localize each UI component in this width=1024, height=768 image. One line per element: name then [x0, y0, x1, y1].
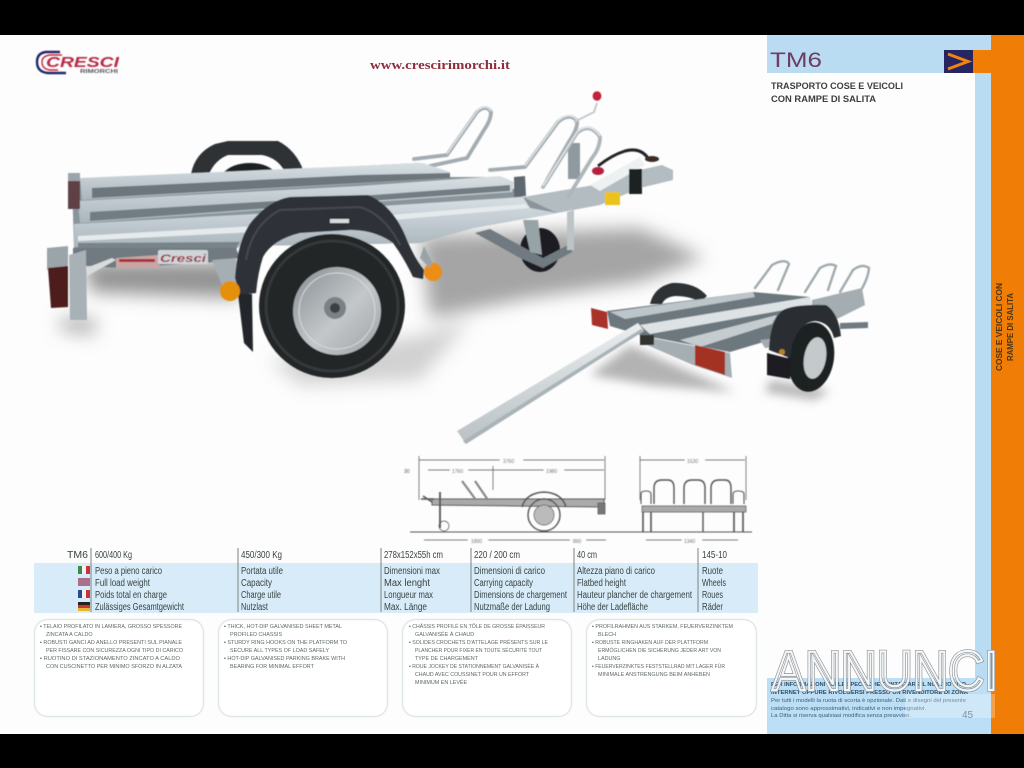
column: flatbed height: 40 cm — [577, 550, 597, 561]
panel: italian features: ▪ ROBUSTI GANCI AD ANELLO PRESENTI SUL PIANALE — [40, 640, 182, 646]
fender bracket — [212, 258, 240, 290]
panel: french features: GALVANISÉE À CHAUD — [415, 631, 474, 638]
icon: arrow box — [944, 50, 991, 73]
panel: german features: ▪ ROBUSTE RINGHAKEN AUF DER PLATTFORM — [592, 640, 708, 646]
column: dimensions: Longueur max — [384, 590, 433, 601]
disclaimer text — [771, 682, 968, 719]
panel: german features: LADUNG — [598, 656, 620, 662]
dimension lines — [419, 460, 745, 540]
column: wheels: Wheels — [702, 578, 726, 589]
front fender — [235, 195, 424, 295]
frame sticker — [158, 250, 208, 265]
panel: french features: TYPE DE CHARGEMENT — [415, 656, 479, 662]
model label: TM6 — [67, 550, 88, 561]
panel: italian features: CON CUSCINETTO PER MINIMO SFORZO IN ALZATA — [46, 664, 182, 670]
panel: italian features: ZINCATA A CALDO — [46, 632, 93, 638]
deck base — [72, 163, 557, 250]
dimension numbers: 3760 — [503, 459, 514, 465]
column: capacity: Charge utile — [241, 590, 281, 601]
watermark: ANNUNCI — [772, 639, 998, 702]
column: wheels: 145-10 — [702, 550, 727, 561]
column: weight: Peso a pieno carico — [95, 566, 162, 577]
rail A — [80, 163, 450, 200]
small left light — [591, 308, 608, 329]
panel: german features: ▪ FEUERVERZINKTES FESTSTELLRAD MIT LAGER FÜR — [592, 663, 725, 670]
column separators — [91, 548, 698, 612]
dimension numbers: 860 — [573, 539, 582, 545]
subtitle: CON RAMPE DI SALITA — [771, 94, 876, 104]
deck — [607, 292, 810, 352]
column: capacity: Portata utile — [241, 566, 283, 577]
bracket — [420, 246, 432, 268]
column: flatbed height — [577, 550, 692, 613]
cable and coupling — [598, 150, 648, 166]
panel: french features: ▪ CHÂSSIS PROFILÉ EN TÔLE DE GROSSE ÉPAISSEUR — [409, 623, 545, 630]
ground line — [410, 531, 752, 533]
panel: german features — [586, 620, 756, 716]
rail C — [74, 197, 557, 248]
rear view — [642, 506, 746, 512]
rear light — [695, 345, 725, 375]
panel: german features: ERMÖGLICHEN DIE SICHERUNG JEDER ART VON — [598, 647, 721, 654]
ground shadow — [590, 345, 830, 400]
panel: english features: SECURE ALL TYPES OF LOAD SAFELY — [230, 648, 329, 654]
column: load dimensions — [474, 550, 567, 613]
subtitle: TRASPORTO COSE E VEICOLI — [771, 81, 903, 91]
panel: french features: ▪ SOLIDES CROCHETS D'ATTELAGE PRÉSENTS SUR LE — [409, 639, 548, 646]
column: wheels: Roues — [702, 590, 723, 601]
column: wheels: Ruote — [702, 566, 723, 577]
column: flatbed height: Höhe der Ladefläche — [577, 602, 648, 613]
panel: english features: ▪ STURDY RING HOOKS ON THE PLATFORM TO — [224, 640, 347, 646]
panel: german features: BLECH — [598, 632, 616, 638]
panel: english features: PROFILED CHASSIS — [230, 632, 283, 638]
logo: Cresci Rimorchi: RIMORCHI — [80, 69, 119, 75]
flags — [78, 566, 90, 611]
column: load dimensions: Carrying capacity — [474, 578, 533, 589]
jockey wheel assembly — [520, 228, 560, 272]
dimension numbers: 1890 — [471, 539, 482, 545]
tongue — [523, 165, 673, 213]
column: flatbed height: Flatbed height — [577, 578, 626, 589]
fender — [769, 305, 841, 358]
spec table — [34, 548, 758, 613]
panel: french features: MINIMUM EN LEVÉE — [415, 679, 468, 686]
ramp — [457, 323, 644, 444]
logo: Cresci Rimorchi — [37, 52, 120, 75]
dimension numbers — [404, 456, 705, 545]
wheel rim — [293, 267, 381, 355]
dimension numbers: 1760 — [452, 469, 463, 475]
side view frame — [432, 499, 604, 507]
column: capacity: 450/300 Kg — [241, 550, 282, 561]
disclaimer text: PER INFORMAZIONI SULLE SPECIFICHE CONTATTARE IL NOSTRO SITO — [771, 682, 967, 688]
website url: www.crescirimorchi.it — [370, 57, 511, 72]
mudflap — [238, 294, 253, 352]
rear light housing and post — [47, 246, 68, 270]
panel: right side blue strip — [767, 72, 991, 734]
column: load dimensions: Dimensions de chargement — [474, 590, 567, 601]
dimension numbers: 1530 — [687, 459, 698, 465]
rail B — [78, 176, 514, 223]
far spare fender — [191, 141, 304, 174]
rear bumper — [647, 337, 732, 378]
panel: french features: PLANCHER POUR FIXER EN TOUTE SÉCURITÉ TOUT — [415, 647, 543, 654]
side beam — [73, 248, 240, 268]
panel: italian features: ▪ RUOTINO DI STAZIONAMENTO ZINCATO A CALDO — [40, 656, 180, 662]
panel: english features: BEARING FOR MINIMAL EFFORT — [230, 664, 315, 670]
main trailer photo — [47, 91, 705, 385]
panel: french features: CHAUD AVEC COUSSINET POUR UN EFFORT — [415, 672, 530, 678]
column: dimensions: 278x152x55h cm — [384, 550, 443, 561]
back fender — [650, 283, 707, 304]
panel: header band — [767, 35, 991, 73]
panel: english features: ▪ THICK, HOT-DIP GALVANISED SHEET METAL — [224, 624, 342, 630]
panel: italian features: PER FISSARE CON SICUREZZA OGNI TIPO DI CARICO — [46, 648, 183, 654]
tire — [259, 234, 405, 378]
amber reflector right — [424, 263, 442, 281]
panel: english features — [218, 620, 388, 716]
column: weight: 600/400 Kg — [95, 550, 132, 561]
panel: french features — [402, 620, 572, 716]
dimension numbers: 1340 — [684, 539, 695, 545]
column: wheels: Räder — [702, 602, 724, 613]
technical drawing — [404, 456, 752, 545]
dimension numbers: 1980 — [546, 469, 557, 475]
rail end caps — [68, 173, 80, 209]
mudflap — [767, 353, 791, 379]
side label: RAMPE DI SALITA — [1006, 293, 1015, 361]
amber reflector left — [220, 281, 240, 301]
ground shadow — [60, 228, 705, 385]
column: weight: Zulässiges Gesamtgewicht — [95, 602, 184, 613]
side label — [995, 283, 1015, 371]
column: weight: Poids total en charge — [95, 590, 167, 601]
panel: english features: ▪ HOT-DIP GALVANISED PARKING BRAKE WITH — [224, 656, 345, 662]
red knob — [593, 91, 601, 101]
column: capacity: Nutzlast — [241, 602, 268, 613]
column: weight — [95, 550, 184, 613]
dimension numbers: 30 — [404, 469, 410, 475]
handle front loop — [543, 128, 600, 197]
panel: german features: ▪ PROFILRAHMEN AUS STARKEM, FEUERVERZINKTEM — [592, 624, 734, 630]
column: weight: Full load weight — [95, 578, 150, 589]
panel: orange side band — [991, 35, 1024, 734]
column: wheels — [702, 550, 727, 613]
panel: italian features: ▪ TELAIO PROFILATO IN LAMIERA, GROSSO SPESSORE — [40, 624, 182, 630]
handles rear layer — [414, 108, 577, 180]
second trailer photo with ramp — [457, 261, 869, 444]
frame sticker: Cresci — [160, 253, 207, 265]
logo: Cresci Rimorchi: CRESCI — [46, 54, 120, 71]
disclaimer text: La Ditta si riserva qualsiasi modifica senza preavviso. — [771, 713, 911, 719]
column: capacity: Capacity — [241, 578, 272, 589]
column: dimensions — [384, 550, 443, 613]
column: dimensions: Dimensioni max — [384, 566, 440, 577]
subtitle — [771, 81, 903, 104]
disclaimer text: Per tutti i modelli la ruota di scorta è opzionale. Dati e disegni del presente — [771, 698, 966, 704]
column: dimensions: Max lenght — [384, 578, 430, 589]
column: flatbed height: Altezza piano di carico — [577, 566, 655, 577]
column: load dimensions: Dimensioni di carico — [474, 566, 545, 577]
panel: german features: MINIMALE ANSTRENGUNG BEIM ANHEBEN — [598, 672, 710, 678]
side label: COSE E VEICOLI CON — [995, 283, 1004, 371]
panel: french features: ▪ ROUE JOCKEY DE STATIONNEMENT GALVANISÉE À — [409, 663, 539, 670]
disclaimer text: catalogo sono approssimativi, indicativi e non impegnativi. — [771, 706, 926, 712]
tire — [783, 319, 839, 395]
lever and post — [574, 103, 597, 122]
column: capacity — [241, 550, 283, 613]
watermark: ANNUNCI — [772, 639, 998, 702]
panel: italian features — [34, 620, 204, 716]
column: flatbed height: Hauteur plancher de chargement — [577, 590, 692, 601]
column: load dimensions: Nutzmaße der Ladung — [474, 602, 550, 613]
disclaimer text: INTERNET OPPURE RIVOLGERSI PRESSO UN RIVENDITORE DI ZONA — [771, 690, 968, 696]
hitch — [840, 322, 868, 329]
page number: 45 — [962, 710, 974, 721]
rim — [801, 335, 829, 381]
column: dimensions: Max. Länge — [384, 602, 427, 613]
yellow box — [605, 192, 620, 205]
table band — [34, 563, 758, 613]
handles — [755, 261, 869, 295]
title: TM6 — [770, 48, 822, 72]
column: load dimensions: 220 / 200 cm — [474, 550, 520, 561]
